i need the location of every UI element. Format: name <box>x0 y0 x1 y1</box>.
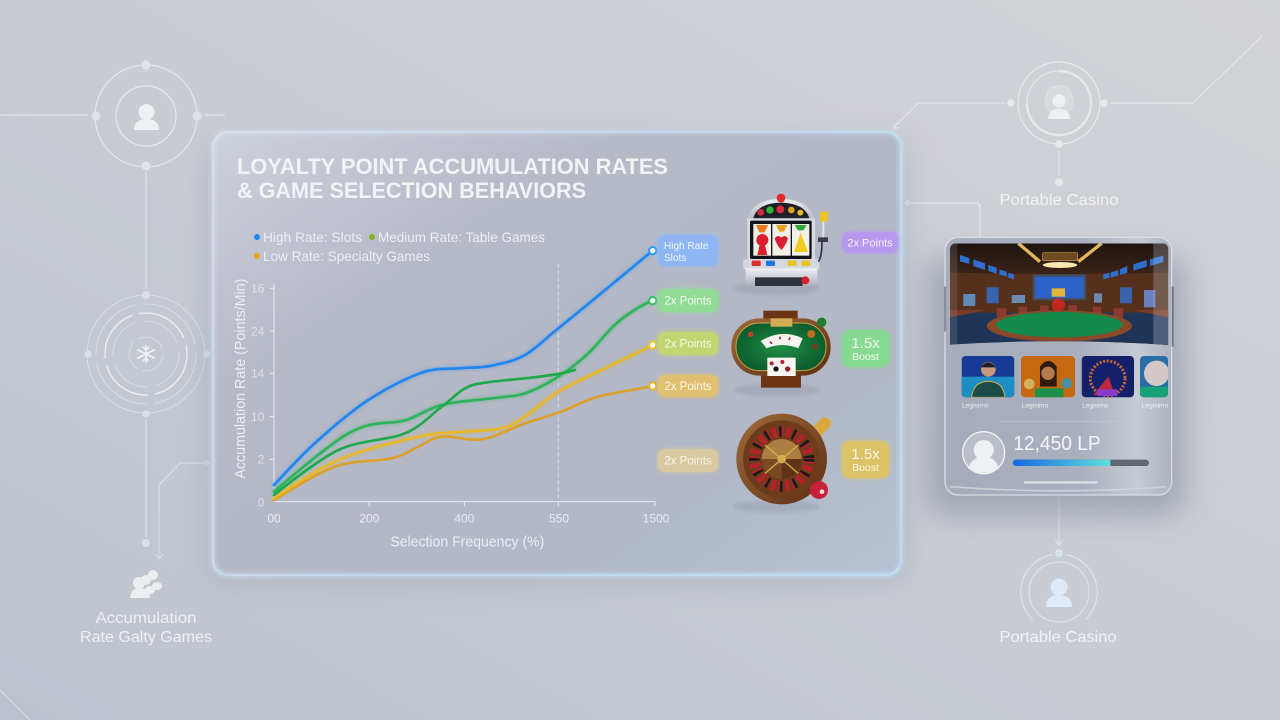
thumbnail captions: Legisimo <box>1022 403 1049 410</box>
progress bar <box>1013 460 1149 466</box>
icons: casino games <box>731 194 831 513</box>
thumbnail: game four <box>1140 356 1169 397</box>
badge: gold 1.5x Boost: Boost <box>852 462 879 474</box>
badge: lime 2x Points: 2x Points <box>664 338 712 350</box>
legend: Medium Rate: Table Games <box>378 229 545 245</box>
axis tick labels: 14 <box>251 367 265 381</box>
badge: purple 2x Points: 2x Points <box>847 238 893 250</box>
curve glows <box>274 251 653 498</box>
legend: Low Rate: Specialty Games <box>263 248 430 264</box>
axis titles: Selection Frequency (%) <box>390 535 544 551</box>
axis tick labels: 200 <box>359 512 380 526</box>
badge: green 2x Points <box>658 289 718 312</box>
top-right headset node <box>1007 62 1108 186</box>
hero image: casino room <box>950 243 1168 345</box>
thumbnail: game one <box>962 356 1014 397</box>
axis tick labels: 550 <box>549 512 569 526</box>
badge: green 2x Points: 2x Points <box>664 296 712 308</box>
badge: orange 2x Points <box>658 375 718 397</box>
icon: headset user <box>1044 86 1074 116</box>
home indicator <box>1024 481 1098 483</box>
accumulation caption with users icon: Accumulation <box>96 610 196 627</box>
line chart: Accumulation Rate (Points/Min) <box>233 279 249 479</box>
axis tick labels: 00 <box>267 512 281 526</box>
axis tick labels: 16 <box>251 282 265 296</box>
icon: avatar <box>963 432 1005 474</box>
panel: chart card <box>213 132 901 575</box>
axis tick labels <box>251 282 670 526</box>
title: LOYALTY POINT ACCUMULATION RATES <box>237 154 668 179</box>
axis tick labels: 10 <box>251 410 265 424</box>
icon: roulette wheel <box>733 414 828 513</box>
thumbnail captions <box>962 403 1169 410</box>
accumulation caption with users icon: Rate Galty Games <box>80 629 212 646</box>
badge: High Rate Slots: Slots <box>664 253 686 264</box>
badge: orange 2x Points: 2x Points <box>664 381 712 393</box>
thumbnail captions: Legisimo <box>962 403 989 410</box>
badge: gold 1.5x Boost <box>842 441 889 478</box>
label: Portable Casino top: Portable Casino <box>1000 192 1119 209</box>
thumbnail: game two <box>1021 356 1075 397</box>
badge: green 1.5x Boost <box>842 330 889 367</box>
icon: slot machine <box>733 194 828 296</box>
title: & GAME SELECTION BEHAVIORS <box>237 178 586 203</box>
curve end markers <box>649 247 656 390</box>
icon: snowflake <box>137 345 155 363</box>
phone shadow <box>925 255 1187 517</box>
axis tick labels: 2 <box>258 453 265 467</box>
badge: green 1.5x Boost: 1.5x <box>851 335 880 352</box>
axis tick labels: 1500 <box>643 512 670 526</box>
icon: card table <box>731 311 831 397</box>
badge: lime 2x Points <box>658 332 718 355</box>
legend <box>254 229 545 264</box>
thumbnail: game three <box>1082 356 1134 397</box>
badge: purple 2x Points <box>842 232 898 253</box>
thumbnail captions: Legisimo <box>1082 403 1109 410</box>
badge: tan 2x Points <box>658 449 718 472</box>
badge: tan 2x Points: 2x Points <box>664 456 712 468</box>
accumulation caption with users icon <box>80 570 212 646</box>
legend: High Rate: Slots <box>263 229 362 245</box>
badge: green 1.5x Boost: Boost <box>852 351 879 363</box>
curve: low rate yellow <box>274 345 653 498</box>
panel shadow <box>205 140 909 585</box>
axis tick labels: 400 <box>454 512 475 526</box>
middle-left concentric target node <box>84 291 210 547</box>
icon: person <box>134 104 159 130</box>
bottom-right user node <box>1021 549 1097 622</box>
axis tick labels: 24 <box>251 324 265 338</box>
curve: medium rate green two <box>274 370 575 495</box>
curve: low rate orange <box>274 386 653 500</box>
panel: mobile app <box>944 237 1174 495</box>
line chart <box>233 247 670 551</box>
label: Portable Casino bottom: Portable Casino <box>1000 629 1117 646</box>
icon: users <box>130 570 162 598</box>
thumbnail captions: Legisimo <box>1142 403 1169 410</box>
axes <box>270 263 655 506</box>
title <box>237 154 668 203</box>
curve: high rate blue <box>274 251 653 485</box>
badge: gold 1.5x Boost: 1.5x <box>851 446 880 463</box>
curve: medium rate green one <box>274 301 653 492</box>
loyalty points value: 12,450 LP <box>1013 433 1101 455</box>
icon: person <box>1046 578 1072 607</box>
badge: High Rate Slots: High Rate <box>664 241 709 252</box>
top-left circular user node <box>92 60 202 170</box>
badge: High Rate Slots <box>658 235 718 266</box>
axis tick labels: 0 <box>258 495 265 509</box>
